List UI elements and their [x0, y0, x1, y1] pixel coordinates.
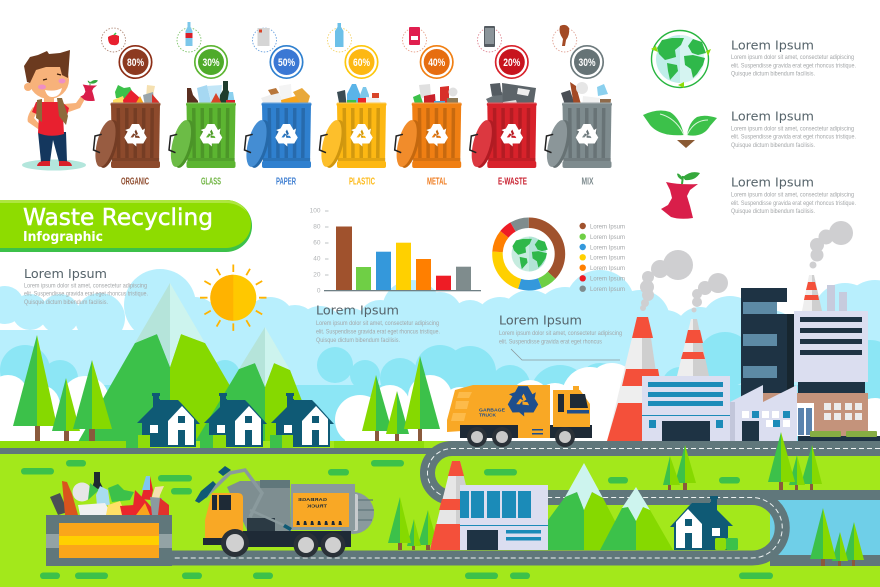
text: lorem block 1: Quisque dictum bibendum facilisis.	[731, 72, 815, 78]
apple core	[80, 80, 98, 101]
icon: can	[402, 27, 426, 52]
text: lorem block 3	[731, 174, 856, 215]
contents	[337, 84, 382, 108]
waste container with garbage	[46, 472, 172, 566]
text: lorem block left	[24, 266, 148, 306]
recycle mark on truck	[504, 386, 540, 420]
text: lorem block 1: elit. Suspendisse gravida erat eget rhoncus tristique.	[731, 64, 856, 70]
percent badge	[345, 46, 378, 78]
text: lorem block 2: Lorem Ipsum	[731, 108, 814, 124]
label: METAL	[427, 176, 447, 188]
icon: phone	[478, 26, 502, 52]
y axis labels: 60	[313, 240, 321, 246]
text: lorem block 1: Lorem Ipsum	[731, 38, 814, 52]
text: lorem block right: elit. Suspendisse gravida erat eget rhoncus	[499, 340, 602, 346]
label: PAPER	[276, 176, 296, 188]
icon: apple	[102, 28, 126, 52]
icon: plastic bottle	[328, 23, 352, 52]
text: lorem block left: elit. Suspendisse gravida erat eget rhoncus tristique.	[24, 292, 148, 298]
percent badge: 40%	[428, 57, 445, 69]
wheels	[221, 529, 346, 558]
text: lorem block 2: Lorem ipsum dolor sit amet, consectetur adipiscing	[731, 126, 854, 132]
main factory building	[642, 376, 730, 441]
text: lorem block 2: Quisque dictum bibendum facilisis.	[731, 143, 815, 149]
wheels	[467, 427, 575, 447]
water	[770, 498, 880, 558]
lower trees	[388, 432, 864, 566]
text: lorem block middle	[316, 302, 440, 344]
label: MIX	[582, 176, 594, 188]
text: lorem block 3: Lorem ipsum dolor sit amet, consectetur adipiscing	[731, 192, 854, 198]
text: lorem block 2	[731, 108, 856, 149]
text: lorem block middle: Quisque dictum bibendum facilisis.	[316, 338, 400, 344]
text: lorem block 2: elit. Suspendisse gravida erat eget rhoncus tristique.	[731, 134, 856, 140]
bin: mix	[543, 25, 612, 188]
text: lorem block 1: Lorem ipsum dolor sit amet, consectetur adipiscing	[731, 55, 854, 61]
traffic cone tower	[430, 461, 482, 550]
subheading: Infographic	[23, 229, 103, 245]
lower cone and building	[430, 461, 548, 550]
blue-window building	[460, 485, 548, 550]
label: E-WASTE	[498, 176, 527, 188]
bin: e-waste	[468, 26, 537, 188]
bin: paper	[242, 28, 312, 188]
sawtooth building	[730, 385, 797, 441]
donut legend: Lorem Ipsum	[590, 277, 625, 283]
garbage pile	[50, 472, 169, 515]
garbage truck lower	[195, 466, 374, 558]
dark tower	[741, 288, 794, 404]
houses upper row	[137, 393, 334, 447]
percent badge	[195, 46, 227, 78]
donut legend: Lorem Ipsum	[590, 256, 625, 262]
contents	[113, 85, 159, 108]
garbage truck upper	[447, 385, 592, 447]
icon: apple core	[661, 172, 700, 219]
icon: recycling globe	[651, 30, 711, 88]
percent badge: 20%	[503, 57, 520, 69]
brown building	[763, 393, 880, 441]
pointer line	[511, 349, 620, 360]
icon: chicken leg	[553, 25, 577, 52]
icon: paper	[252, 28, 276, 52]
y axis labels: 20	[313, 272, 321, 278]
trees upper left	[13, 335, 112, 442]
text: lorem block 1	[731, 38, 856, 78]
y axis labels: 40	[313, 256, 321, 262]
donut legend: Lorem Ipsum	[590, 245, 625, 251]
smoke	[640, 221, 853, 312]
text: lorem block middle: Lorem Ipsum	[316, 302, 399, 318]
text: lorem block left: Quisque dictum bibendum facilisis.	[24, 300, 108, 306]
percent badge: 30%	[578, 57, 596, 69]
label: GLASS	[201, 176, 221, 188]
contents	[561, 82, 611, 109]
percent badge	[571, 46, 603, 78]
label: ORGANIC	[121, 176, 149, 188]
donut globe	[512, 236, 548, 272]
background clouds	[0, 269, 880, 450]
mirrored truck lettering: GARBAGE	[298, 497, 327, 502]
light blue clouds	[0, 269, 880, 442]
green road markers	[21, 460, 773, 579]
bushes by houses	[126, 435, 293, 448]
donut legend: Lorem Ipsum	[590, 235, 625, 241]
ground	[0, 441, 880, 587]
donut legend	[580, 223, 625, 293]
text: lorem block right: Lorem ipsum dolor sit amet, consectetur adipiscing	[499, 331, 622, 337]
icon: bottle	[177, 22, 201, 52]
donut chart	[497, 223, 560, 285]
contents	[187, 81, 235, 108]
contents	[413, 84, 458, 109]
y axis labels: 80	[313, 224, 321, 230]
percent badge	[420, 46, 453, 78]
text: lorem block 3: Lorem Ipsum	[731, 174, 814, 190]
text: lorem block 3: elit. Suspendisse gravida erat eget rhoncus tristique.	[731, 201, 856, 207]
text: lorem block left: Lorem ipsum dolor sit amet, consectetur adipiscing	[24, 284, 147, 290]
percent badge: 50%	[278, 57, 295, 69]
bin: organic	[91, 28, 160, 188]
text: lorem block middle: elit. Suspendisse gravida erat eget rhoncus tristique.	[316, 330, 440, 336]
tall grey building	[794, 311, 868, 394]
small cooling tower	[677, 319, 709, 376]
mountains behind houses	[78, 283, 318, 442]
boy character	[22, 50, 98, 170]
y axis labels: 0	[317, 288, 321, 294]
percent badge	[270, 46, 303, 78]
label: PLASTIC	[349, 176, 375, 188]
bin: metal	[393, 27, 462, 188]
lower house	[670, 496, 738, 550]
contents	[261, 84, 310, 108]
percent badge: 60%	[353, 57, 370, 69]
lower mountains	[548, 463, 673, 550]
bin: plastic	[317, 23, 386, 188]
percent badge	[496, 46, 528, 78]
donut legend: Lorem Ipsum	[590, 224, 625, 230]
truck lettering: TRUCK	[479, 412, 497, 418]
mirrored truck lettering: TRUCK	[306, 504, 327, 508]
bin: glass	[167, 22, 236, 188]
bar chart	[310, 208, 481, 294]
mid blue clouds	[0, 332, 880, 442]
heading: Waste Recycling	[23, 205, 213, 231]
mirrored truck lettering	[298, 497, 327, 508]
sun	[200, 264, 266, 331]
text: lorem block 3: Quisque dictum bibendum facilisis.	[731, 209, 815, 215]
roads	[0, 448, 880, 566]
donut legend: Lorem Ipsum	[590, 287, 625, 293]
icon: sprout	[643, 111, 717, 148]
large cooling tower	[607, 317, 666, 441]
percent badge: 30%	[202, 57, 220, 69]
percent badge: 80%	[127, 57, 144, 69]
truck lettering: GARBAGE	[479, 408, 505, 412]
text: lorem block right: Lorem Ipsum	[499, 312, 582, 328]
text: lorem block middle: Lorem ipsum dolor sit amet, consectetur adipiscing	[316, 321, 439, 327]
percent badge	[119, 46, 152, 78]
truck lettering	[479, 408, 505, 418]
y axis labels	[310, 208, 321, 294]
small stack and chimneys	[802, 275, 847, 311]
trees upper middle	[362, 356, 440, 441]
text: lorem block right	[499, 312, 622, 346]
factory complex	[607, 275, 880, 441]
white clouds	[0, 363, 880, 450]
y axis labels: 100	[310, 208, 321, 214]
contents	[486, 83, 536, 109]
text: lorem block left: Lorem Ipsum	[24, 266, 107, 281]
donut legend: Lorem Ipsum	[590, 266, 625, 272]
title banner	[0, 200, 252, 252]
